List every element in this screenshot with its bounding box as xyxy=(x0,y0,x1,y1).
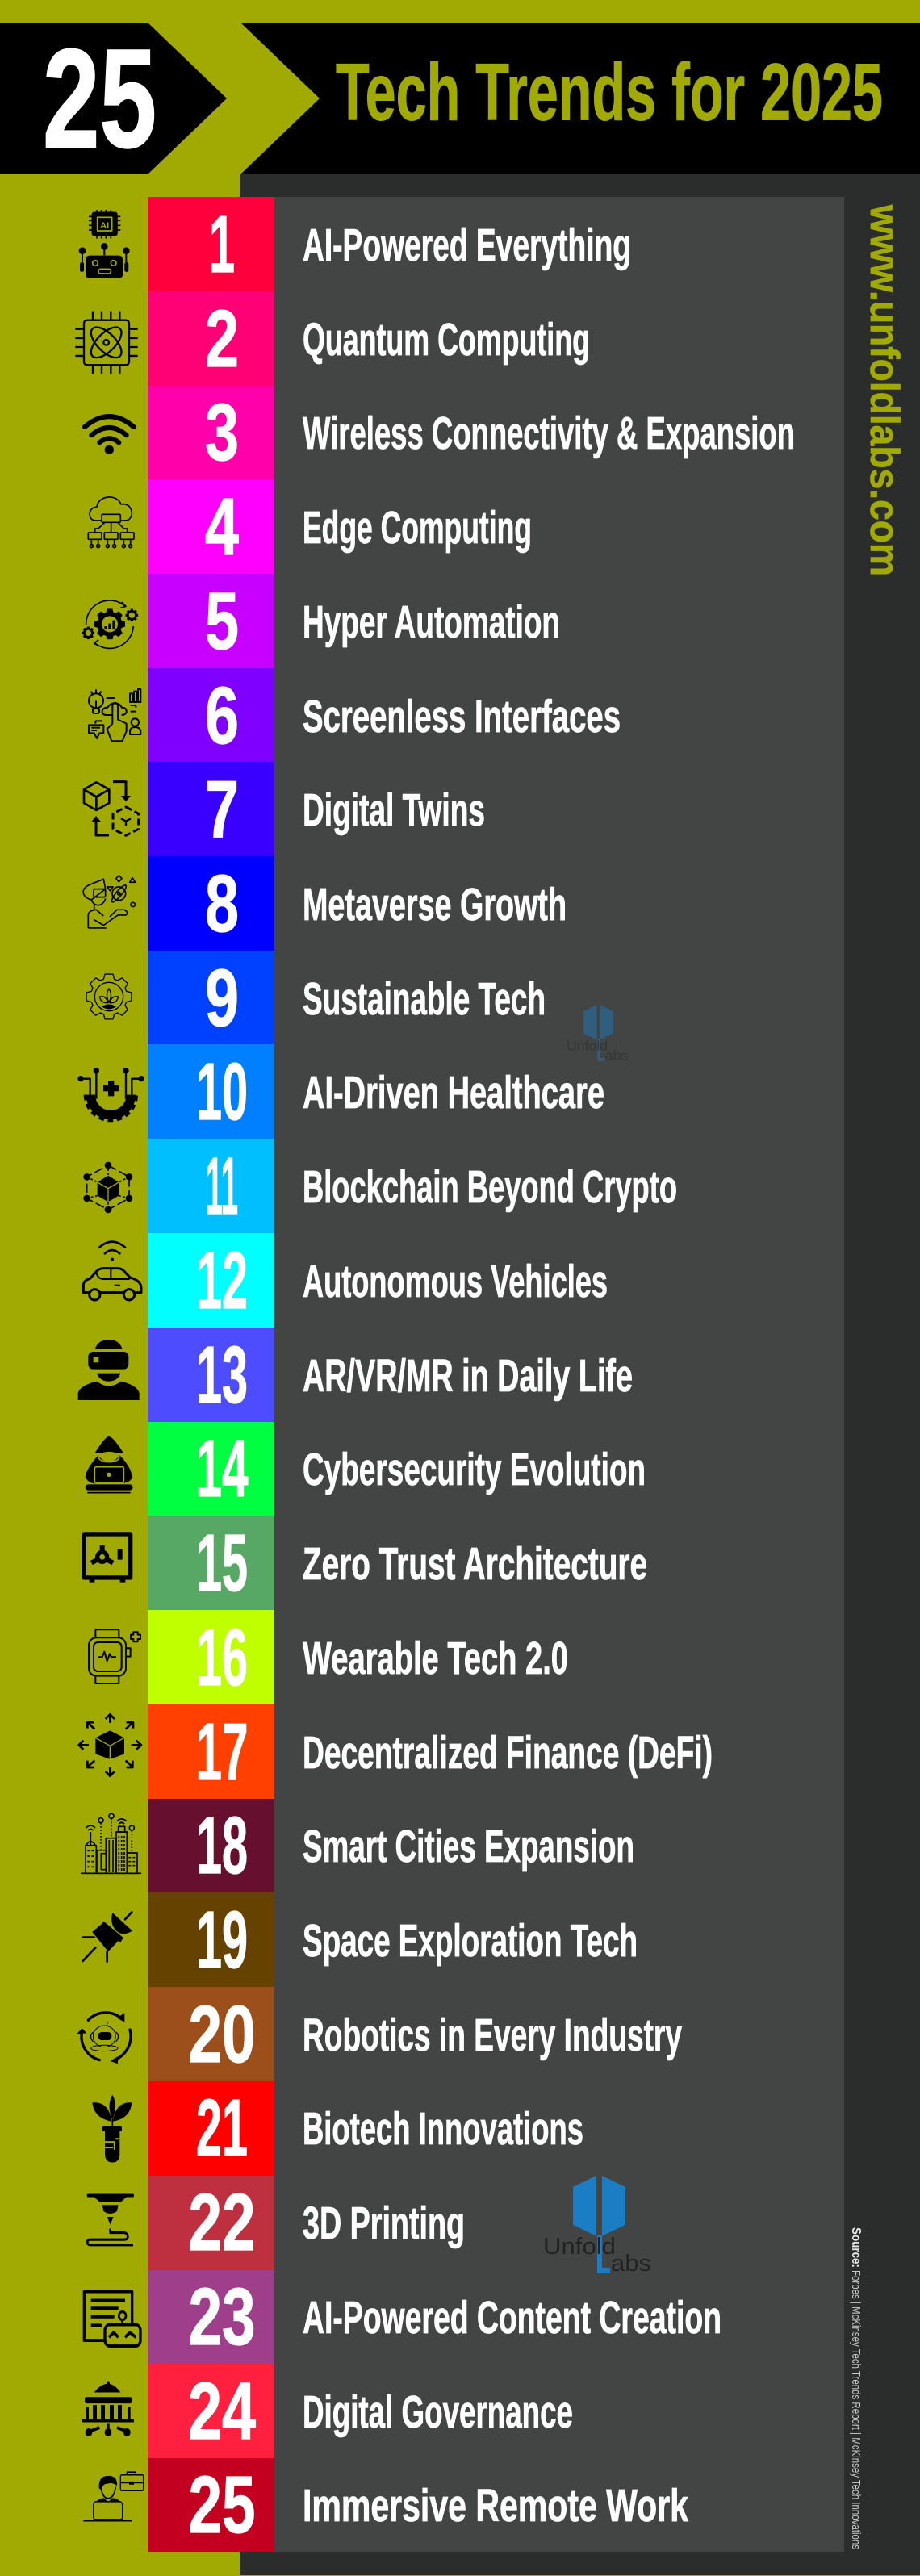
watermark logo: small faded: abs xyxy=(605,1048,628,1063)
watermark logo: small faded: Unfold xyxy=(567,1038,608,1053)
number block 19: 19 xyxy=(196,1895,248,1985)
number block 7: 7 xyxy=(205,764,239,855)
trend label 11: Blockchain Beyond Crypto xyxy=(303,1161,677,1213)
number block 1 xyxy=(148,197,274,291)
row 1 xyxy=(79,197,631,291)
row 23 xyxy=(84,2270,721,2364)
watermark logo: large xyxy=(543,2176,651,2277)
row 22 xyxy=(87,2176,465,2270)
number block 7 xyxy=(148,762,274,856)
number block 21 xyxy=(148,2081,274,2176)
row 21 xyxy=(92,2081,583,2176)
trend label 14: Cybersecurity Evolution xyxy=(303,1444,646,1495)
number block 22: 22 xyxy=(189,2177,255,2268)
trend label 12: Autonomous Vehicles xyxy=(303,1256,608,1307)
icon: autonomous car xyxy=(83,1242,141,1300)
trend label 2: Quantum Computing xyxy=(303,314,590,366)
number block 3: 3 xyxy=(205,387,239,478)
row 25 xyxy=(83,2458,688,2552)
row 12 xyxy=(83,1233,608,1328)
trend label 8: Metaverse Growth xyxy=(303,879,567,930)
row 2 xyxy=(75,291,590,386)
row 5 xyxy=(82,574,560,668)
icon: automation gears xyxy=(82,600,138,648)
header: title xyxy=(240,23,920,174)
row 9 xyxy=(86,951,546,1045)
number block 11: 11 xyxy=(206,1141,238,1232)
number block 18 xyxy=(148,1799,274,1892)
row 4 xyxy=(88,479,532,574)
row 8 xyxy=(83,856,567,951)
number block 2: 2 xyxy=(205,294,239,384)
icon: safe vault xyxy=(84,1534,131,1583)
number block 14 xyxy=(148,1422,274,1516)
watermark logo: large: abs xyxy=(611,2251,651,2277)
trend label 6: Screenless Interfaces xyxy=(303,691,621,742)
icon: decentralized cube xyxy=(79,1714,141,1776)
icon: hacker xyxy=(86,1436,133,1493)
number block 16 xyxy=(148,1610,274,1705)
trend label 21: Biotech Innovations xyxy=(303,2103,583,2155)
row 10 xyxy=(77,1044,604,1140)
website url, rotated: www.unfoldlabs.com xyxy=(862,204,907,576)
row 19 xyxy=(83,1892,638,1987)
number block 9 xyxy=(148,951,274,1045)
trend label 5: Hyper Automation xyxy=(303,596,560,648)
dark main panel xyxy=(240,174,920,2575)
trend label 19: Space Exploration Tech xyxy=(303,1915,638,1967)
number block 15 xyxy=(148,1516,274,1610)
icon: digital twin cubes xyxy=(84,782,139,835)
number block 23 xyxy=(148,2270,274,2364)
number block 14: 14 xyxy=(195,1424,249,1514)
trend label 24: Digital Governance xyxy=(303,2386,573,2438)
light list panel xyxy=(274,197,844,2552)
icon: remote worker xyxy=(83,2472,144,2521)
icon: robot with cycle arrows xyxy=(77,2013,131,2064)
number block 25 xyxy=(148,2458,274,2552)
trend label 7: Digital Twins xyxy=(303,784,485,836)
icon: AI content document xyxy=(84,2292,140,2346)
icon: smart city xyxy=(81,1813,141,1873)
icon: sustainable gear xyxy=(86,974,132,1019)
row 16 xyxy=(89,1610,568,1705)
number block 24 xyxy=(148,2364,274,2458)
number block 3 xyxy=(148,386,274,479)
row 11 xyxy=(83,1139,677,1233)
row 3 xyxy=(85,386,795,479)
icon: biotech test tube xyxy=(92,2095,132,2163)
number block 4 xyxy=(148,479,274,574)
trend label 9: Sustainable Tech xyxy=(303,973,546,1025)
number block 21: 21 xyxy=(196,2083,248,2173)
number block 20 xyxy=(148,1987,274,2081)
number block 13 xyxy=(148,1328,274,1422)
trend label 25: Immersive Remote Work xyxy=(303,2480,688,2532)
number block 18: 18 xyxy=(196,1800,248,1891)
number block 6: 6 xyxy=(205,671,239,761)
icon: touchless hand and cloud xyxy=(89,689,140,741)
number block 9: 9 xyxy=(205,953,239,1043)
icon: VR headset person xyxy=(78,1340,140,1400)
icon: satellite xyxy=(83,1912,132,1962)
row 14 xyxy=(86,1422,646,1516)
number block 5: 5 xyxy=(205,576,239,667)
number block 17 xyxy=(148,1704,274,1799)
header: count badge: 25 xyxy=(43,19,157,177)
number block 5 xyxy=(148,574,274,668)
number block 20: 20 xyxy=(189,1989,255,2080)
watermark logo: small faded xyxy=(567,1005,628,1063)
trend label 16: Wearable Tech 2.0 xyxy=(303,1633,568,1684)
number block 8 xyxy=(148,856,274,951)
trend label 13: AR/VR/MR in Daily Life xyxy=(303,1350,633,1402)
trend label 22: 3D Printing xyxy=(303,2198,465,2249)
trend label 15: Zero Trust Architecture xyxy=(303,1538,647,1590)
row 24 xyxy=(82,2364,573,2458)
number block 13: 13 xyxy=(196,1330,248,1420)
number block 19 xyxy=(148,1892,274,1987)
row 7 xyxy=(84,762,485,856)
icon: metaverse person xyxy=(83,876,136,928)
icon: AI robot xyxy=(79,210,130,278)
icon: smart watch xyxy=(89,1629,140,1683)
header band xyxy=(0,19,920,177)
trend label 4: Edge Computing xyxy=(303,502,532,554)
icon: AI healthcare gear xyxy=(77,1068,144,1120)
row 18 xyxy=(81,1799,634,1892)
number block 4: 4 xyxy=(205,482,239,572)
row 15 xyxy=(84,1516,647,1610)
number block 8: 8 xyxy=(205,859,239,949)
watermark logo: large: Unfold xyxy=(543,2234,616,2260)
icon: wifi xyxy=(85,416,134,454)
trend label 1: AI-Powered Everything xyxy=(303,220,631,271)
number block 17: 17 xyxy=(195,1707,249,1797)
number block 12 xyxy=(148,1233,274,1328)
trend label 18: Smart Cities Expansion xyxy=(303,1821,634,1872)
icon: edge cloud network xyxy=(88,497,134,548)
number block 2 xyxy=(148,291,274,386)
number block 11 xyxy=(148,1139,274,1233)
source line, rotated: Source: xyxy=(849,2227,863,2268)
trend label 17: Decentralized Finance (DeFi) xyxy=(303,1727,713,1779)
row 17 xyxy=(79,1704,713,1799)
trend label 20: Robotics in Every Industry xyxy=(303,2009,682,2061)
number block 12: 12 xyxy=(196,1236,248,1326)
number block 23: 23 xyxy=(189,2272,255,2362)
number block 24: 24 xyxy=(188,2366,256,2457)
trend label 10: AI-Driven Healthcare xyxy=(303,1067,604,1119)
number block 15: 15 xyxy=(196,1518,248,1608)
icon: quantum chip xyxy=(75,312,138,374)
header: count badge xyxy=(0,19,227,177)
number block 10: 10 xyxy=(196,1047,248,1137)
number block 1: 1 xyxy=(209,199,235,290)
row 13 xyxy=(78,1328,633,1422)
number block 16: 16 xyxy=(196,1612,248,1703)
number block 6 xyxy=(148,668,274,762)
icon: AI robot: AI xyxy=(100,221,109,231)
icon: blockchain cube xyxy=(83,1162,132,1213)
row 6 xyxy=(89,668,621,762)
icon: digital government building xyxy=(82,2381,134,2436)
number block 10 xyxy=(148,1044,274,1140)
row 20 xyxy=(77,1987,682,2081)
icon: 3D printer nozzle xyxy=(87,2194,134,2245)
number block 25: 25 xyxy=(189,2460,255,2550)
number block 22 xyxy=(148,2176,274,2270)
